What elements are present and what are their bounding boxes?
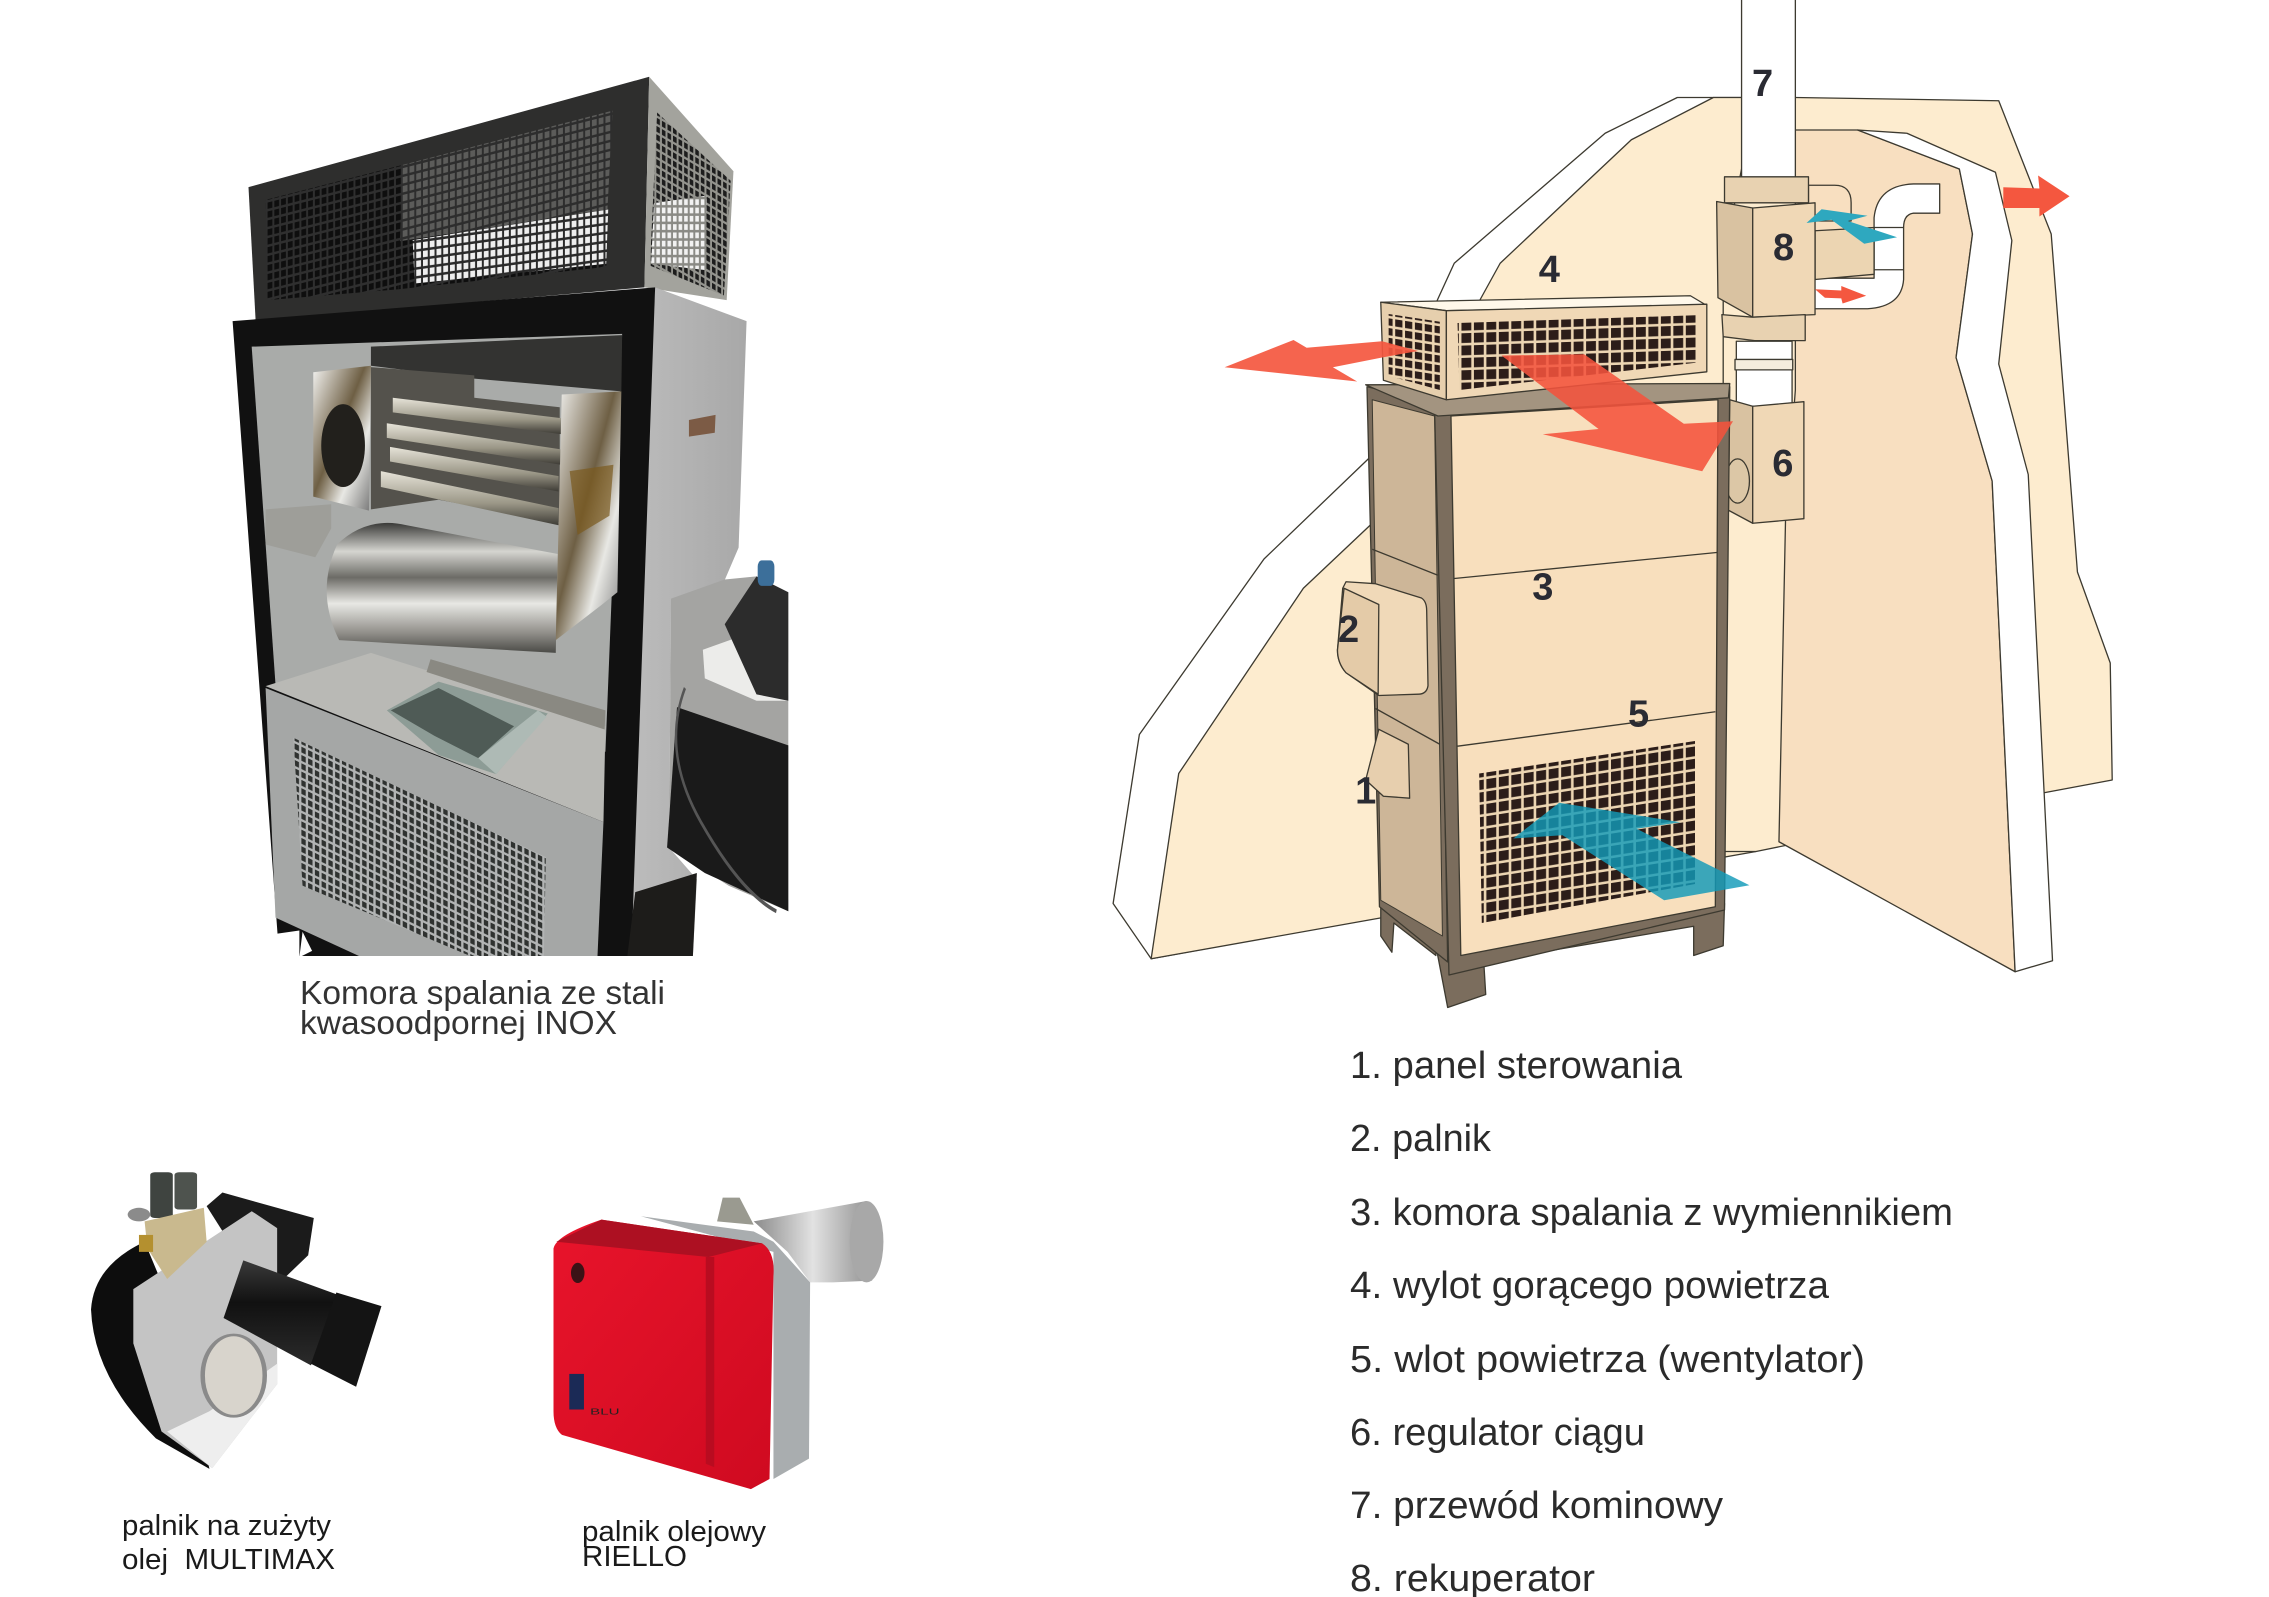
foot notch	[299, 932, 312, 957]
lower fan panel	[266, 688, 603, 956]
legend list: 1. panel sterowania	[1350, 1045, 1683, 1087]
caption: RIELLO: RIELLO	[582, 1541, 687, 1573]
riello sight dot	[571, 1263, 585, 1283]
caption: MULTIMAX	[122, 1510, 335, 1576]
wall: inner panel	[1779, 130, 2015, 972]
right collector plate	[556, 391, 621, 640]
air inlet grille	[1479, 741, 1695, 923]
legend list: 2. palnik	[1350, 1118, 1492, 1160]
diagram numbers: 7	[1752, 63, 1773, 105]
legend list: 7. przewód kominowy	[1350, 1485, 1723, 1527]
air louvres	[387, 682, 548, 774]
burner valve block	[128, 1172, 207, 1279]
burner housing	[1337, 582, 1428, 696]
diagram numbers	[1338, 63, 1794, 812]
arrow: recuperator hot	[1815, 286, 1866, 304]
photo: heater with open combustion chamber	[233, 77, 788, 957]
arrow: recuperator cold	[1807, 209, 1897, 244]
heater legs	[1381, 897, 1725, 1008]
lower pipe	[427, 659, 605, 729]
diagram numbers: 5	[1628, 694, 1649, 736]
legend list: 4. wylot gorącego powietrza	[1350, 1265, 1830, 1307]
legend list: 6. regulator ciągu	[1350, 1412, 1645, 1454]
diagram: heater installation	[1113, 0, 2112, 1008]
riello steel body	[641, 1216, 810, 1479]
top outlet box	[1381, 296, 1707, 400]
burner black rear box	[207, 1193, 314, 1282]
caption: RIELLO	[582, 1516, 767, 1573]
steel side casing	[625, 287, 747, 956]
control panel	[1366, 729, 1410, 798]
heater body side	[1367, 387, 1448, 962]
combustion cylinder	[327, 523, 558, 653]
riello logo: BLU	[590, 1408, 619, 1417]
panel behind exchanger tubes	[371, 367, 560, 522]
heater front panels	[1372, 400, 1718, 956]
diagram numbers: 1	[1355, 771, 1376, 812]
caption: RIELLO: palnik olejowy	[582, 1516, 767, 1548]
arrow: cold inlet	[1513, 803, 1749, 900]
chamber interior	[252, 334, 622, 752]
legend list: 5. wlot powietrza (wentylator)	[1350, 1339, 1865, 1381]
chamber floor	[266, 653, 605, 822]
burner black shell	[91, 1242, 209, 1469]
draft regulator unit	[1726, 400, 1804, 523]
wall: left	[1113, 98, 1756, 959]
legend list: 3. komora spalania z wymiennikiem	[1350, 1192, 1953, 1234]
attached burner	[627, 560, 788, 956]
caption: combustion chamber: Komora spalania ze stali	[300, 974, 665, 1011]
photo: RIELLO oil burner	[554, 1198, 883, 1489]
exchanger tubes	[381, 398, 561, 525]
arrow: hot air to room	[1501, 354, 1733, 471]
riello steel tube	[717, 1198, 883, 1282]
recuperator unit	[1717, 177, 1874, 341]
diagram numbers: 8	[1773, 227, 1794, 269]
diagram numbers: 3	[1532, 566, 1553, 608]
top air outlet box	[248, 77, 733, 321]
chimney flue	[1742, 0, 1795, 182]
burner black blast tube	[224, 1260, 336, 1365]
riello red cover	[554, 1220, 774, 1489]
burner inspection disk	[203, 1335, 265, 1416]
caption: combustion chamber	[300, 974, 665, 1041]
left collector plate	[266, 366, 371, 557]
caption: MULTIMAX: palnik na zużyty	[122, 1510, 332, 1542]
riello logo	[569, 1374, 619, 1417]
burner silver casing	[133, 1211, 277, 1468]
arrow: exhaust out	[2003, 176, 2070, 216]
arrow: hot air left	[1225, 340, 1418, 382]
heater body front frame	[1435, 387, 1730, 975]
rating plate	[689, 415, 716, 437]
diagram numbers: 4	[1539, 249, 1560, 291]
wall: right outer	[1723, 98, 2112, 852]
black front frame	[233, 287, 655, 956]
diagram numbers: 6	[1772, 443, 1793, 485]
recuperator pipes	[1770, 184, 1940, 309]
wall: white cut band	[1858, 130, 2053, 972]
caption: combustion chamber: kwasoodpornej INOX	[300, 1004, 617, 1041]
legend list	[1350, 1045, 1953, 1597]
diagram numbers: 2	[1338, 609, 1359, 651]
caption: MULTIMAX: olej MULTIMAX	[122, 1544, 335, 1576]
flue connector	[1735, 341, 1793, 406]
photo: MULTIMAX waste oil burner	[91, 1172, 381, 1469]
